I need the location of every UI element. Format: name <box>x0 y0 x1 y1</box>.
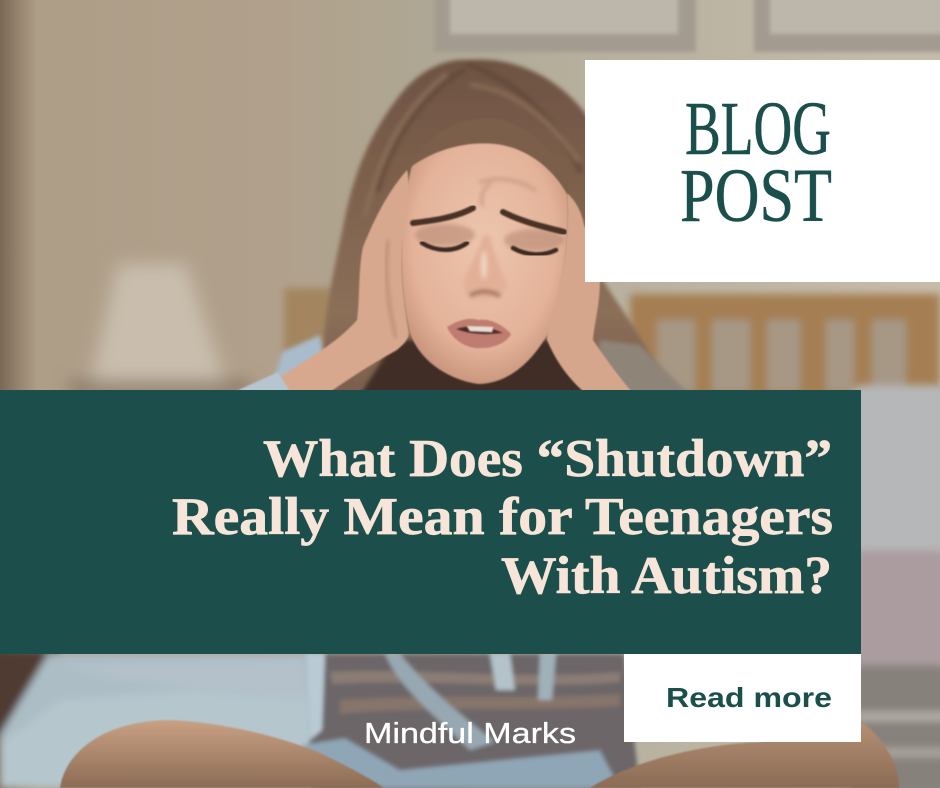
left knee <box>60 720 384 788</box>
panel: title banner <box>0 390 861 654</box>
heading: post: POST <box>680 154 832 238</box>
title line 3: With Autism? <box>501 547 832 605</box>
right hand and arm <box>547 193 632 392</box>
eyes <box>422 243 556 254</box>
right knee <box>590 722 899 788</box>
eyebrows <box>413 208 564 232</box>
hair parting over forehead <box>406 118 572 198</box>
picture frames on the wall <box>434 0 940 52</box>
shorts <box>300 738 620 788</box>
shoulder and shirt <box>590 340 690 395</box>
mouth <box>447 319 511 348</box>
face <box>402 142 568 384</box>
hair strands <box>365 65 580 215</box>
panel: blog post card <box>585 60 940 282</box>
nose <box>463 235 507 300</box>
eye shadows <box>415 224 564 251</box>
forehead creases <box>480 179 535 205</box>
hair behind the head <box>323 59 668 395</box>
pillows at the right <box>850 385 940 788</box>
button: read more <box>624 654 861 742</box>
bedside lamp <box>70 264 250 394</box>
legs <box>60 720 899 788</box>
wooden headboard <box>284 288 940 404</box>
left hand shadow <box>386 240 396 338</box>
brand name: Mindful Marks <box>364 718 576 750</box>
lower shirt <box>306 654 640 788</box>
dark hair under the chin <box>360 340 590 395</box>
shirt cuff <box>234 372 290 392</box>
button: read more: Read more <box>666 682 832 713</box>
bed and blanket <box>0 650 320 788</box>
heading: blog: BLOG <box>685 87 831 171</box>
left hand and arm <box>280 170 409 392</box>
title line 1: What Does “Shutdown” <box>263 430 832 488</box>
title line 2: Really Mean for Teenagers <box>172 488 833 546</box>
